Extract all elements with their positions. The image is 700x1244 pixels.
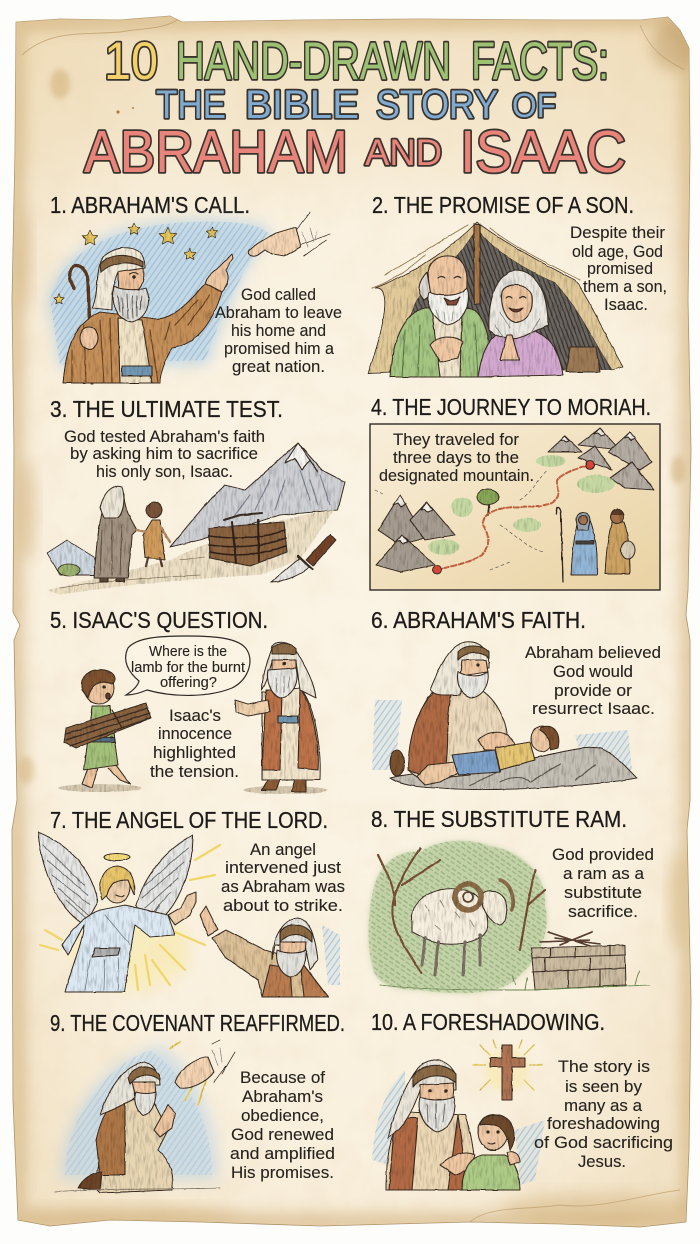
heading 7: 7. THE ANGEL OF THE LORD. xyxy=(50,807,328,833)
blue wash xyxy=(60,1045,218,1180)
speech bubble xyxy=(126,636,250,695)
heading 1: 1. ABRAHAM'S CALL. xyxy=(50,192,250,218)
caption 10: foreshadowing xyxy=(547,1114,660,1133)
raised hand xyxy=(205,254,233,292)
wings xyxy=(38,832,193,928)
title xyxy=(84,32,626,185)
caption 5: Isaac's xyxy=(169,706,221,725)
head xyxy=(118,265,144,292)
head xyxy=(104,871,130,903)
start and end markers xyxy=(432,460,594,574)
grass xyxy=(380,971,650,990)
title: BIBLE xyxy=(245,83,359,127)
caption 7: An angel xyxy=(250,840,316,859)
Isaac xyxy=(462,1114,520,1190)
speech bubble: Where is the xyxy=(149,643,227,660)
wood bundle xyxy=(209,513,287,566)
caption 9 xyxy=(230,1068,335,1182)
caption 2 xyxy=(570,223,667,314)
caption 10: The story is xyxy=(558,1057,650,1076)
caption 1: promised him a xyxy=(224,339,335,358)
staff xyxy=(70,265,92,383)
right mountains xyxy=(548,428,654,490)
heading 3: 3. THE ULTIMATE TEST. xyxy=(50,396,283,422)
caption 6: Abraham believed xyxy=(525,643,661,662)
caption 7 xyxy=(221,840,345,915)
ram body xyxy=(412,889,488,944)
panel: 7 The angel of the Lord xyxy=(38,807,345,997)
heading 9: 9. THE COVENANT REAFFIRMED. xyxy=(50,1010,345,1036)
panel: 1 Abraham's call xyxy=(48,192,342,383)
icon: divine pointing hand xyxy=(248,212,330,256)
panel: 9 The covenant reaffirmed xyxy=(50,1010,345,1193)
caption 10: Jesus. xyxy=(578,1152,626,1171)
caption 2: Isaac. xyxy=(604,295,648,314)
caption 6: resurrect Isaac. xyxy=(532,699,655,718)
caption 10: many as a xyxy=(564,1096,643,1115)
knife xyxy=(271,534,336,582)
panel: 10 A foreshadowing xyxy=(371,1009,673,1190)
title: 10 xyxy=(104,32,158,91)
caption 9: Abraham's xyxy=(242,1087,323,1106)
robe xyxy=(62,905,175,992)
Abraham xyxy=(390,256,492,377)
caption 7: about to strike. xyxy=(223,896,343,915)
caption 9: and amplified xyxy=(230,1144,335,1163)
caption 1: God called xyxy=(241,285,316,304)
Abraham from behind xyxy=(94,490,137,578)
illustration: Abraham, Isaac and the cross xyxy=(372,1040,545,1190)
caption 9: His promises. xyxy=(231,1163,334,1182)
caption 3 xyxy=(64,427,265,481)
caption 1: Abraham to leave xyxy=(215,303,342,322)
heading 10: 10. A FORESHADOWING. xyxy=(371,1009,605,1035)
caption 5: highlighted xyxy=(153,743,236,762)
caption 3: his only son, Isaac. xyxy=(96,462,233,481)
caption 5: the tension. xyxy=(150,762,239,781)
caption 6: God would xyxy=(553,662,633,681)
panel: 2 The promise of a son xyxy=(368,192,667,377)
tent xyxy=(368,222,623,373)
illustration: Abraham and Sarah in a tent xyxy=(368,222,623,377)
caption 5 xyxy=(150,706,239,781)
caption 2: Despite their xyxy=(570,223,665,242)
caption 1: great nation. xyxy=(232,357,325,376)
Abraham xyxy=(390,642,516,780)
title: STORY xyxy=(376,83,498,127)
caption 8: substitute xyxy=(564,883,642,902)
panel: 5 Isaac's question xyxy=(50,607,327,794)
speech bubble: offering? xyxy=(160,674,217,691)
illustration: father and son walking to the mountain xyxy=(47,443,345,595)
caption 10: is seen by xyxy=(565,1077,642,1096)
caption 1: his home and xyxy=(231,321,326,340)
caption 7: as Abraham was xyxy=(221,877,345,896)
caption 6: provide or xyxy=(554,681,632,700)
rays xyxy=(40,845,220,990)
heading 6: 6. ABRAHAM'S FAITH. xyxy=(371,607,586,633)
Abraham xyxy=(386,1060,476,1190)
heading 4: 4. THE JOURNEY TO MORIAH. xyxy=(371,394,651,420)
title: ABRAHAM xyxy=(84,119,348,185)
map xyxy=(370,424,660,590)
panel: 3 The ultimate test xyxy=(47,396,345,595)
illustration: angel stopping Abraham xyxy=(38,832,340,997)
icon: cross with rays xyxy=(473,1040,542,1100)
title: ISAAC xyxy=(460,119,626,185)
heading 2: 2. THE PROMISE OF A SON. xyxy=(372,192,634,218)
panel: 6 Abraham's faith xyxy=(371,607,661,790)
speech bubble: lamb for the burnt xyxy=(131,659,246,676)
caption 6 xyxy=(525,643,661,718)
caption 9: Because of xyxy=(240,1068,325,1087)
caption 2: them a son, xyxy=(583,277,667,296)
ram head xyxy=(482,891,507,925)
heading 5: 5. ISAAC'S QUESTION. xyxy=(50,607,268,633)
caption 7: intervened just xyxy=(225,858,341,877)
title: AND xyxy=(365,132,442,173)
title: THE xyxy=(156,83,226,127)
caption 4: designated mountain. xyxy=(379,466,534,485)
Abraham reaching up xyxy=(200,906,328,997)
caption 2: old age, God xyxy=(572,242,663,261)
caption 8 xyxy=(552,845,654,921)
illustration: ram in the thicket and stone altar xyxy=(369,841,650,993)
Isaac on map xyxy=(605,509,635,574)
bush xyxy=(58,564,80,576)
green patches xyxy=(428,455,615,555)
panel: 4 The journey to Moriah xyxy=(370,394,660,590)
illustration: Abraham kneeling beside Isaac xyxy=(372,642,637,790)
caption 8: God provided xyxy=(552,845,654,864)
Isaac lying xyxy=(417,726,559,785)
ground xyxy=(47,510,334,595)
illustration: Abraham answering xyxy=(235,642,327,794)
caption 3: God tested Abraham's faith xyxy=(64,427,265,446)
title: FACTS: xyxy=(471,32,609,91)
kneeling Abraham xyxy=(78,1062,175,1193)
altar xyxy=(531,932,626,990)
robe xyxy=(63,283,222,383)
caption 4: They traveled for xyxy=(393,430,519,449)
panel: 8 The substitute ram xyxy=(369,806,654,993)
caption 8: sacrifice. xyxy=(568,902,638,921)
caption 5: innocence xyxy=(158,724,232,743)
halo xyxy=(104,854,130,860)
illustration: Abraham pointing at stars xyxy=(48,212,330,383)
illustration: Isaac carrying wood xyxy=(58,670,151,792)
jar xyxy=(566,347,600,372)
Sarah xyxy=(478,270,563,377)
faint dashed trails xyxy=(375,470,548,570)
caption 4: three days to the xyxy=(393,448,519,467)
bush xyxy=(369,841,547,993)
dashed journey path xyxy=(437,465,590,570)
hand on staff xyxy=(80,327,98,349)
caption 4 xyxy=(379,430,534,485)
caption 2: promised xyxy=(587,259,653,278)
Abraham on map xyxy=(557,507,597,582)
caption 3: by asking him to sacrifice xyxy=(70,444,258,463)
caption 9: obedience, xyxy=(241,1106,324,1125)
caption 1 xyxy=(215,285,342,376)
divine open hand xyxy=(175,1040,235,1088)
left mountains xyxy=(376,495,455,572)
rock xyxy=(390,748,637,790)
title: OF xyxy=(512,87,556,125)
tree xyxy=(378,848,545,973)
mountains xyxy=(47,443,345,575)
illustration: Abraham praying beneath God's hand xyxy=(55,1040,235,1193)
title: HAND-DRAWN xyxy=(176,32,451,91)
caption 10 xyxy=(534,1057,673,1171)
Isaac from behind xyxy=(143,520,165,560)
caption 10: of God sacrificing xyxy=(534,1133,673,1152)
caption 9: God renewed xyxy=(231,1125,334,1144)
yellow glow xyxy=(70,910,190,990)
heading 8: 8. THE SUBSTITUTE RAM. xyxy=(371,806,627,832)
caption 8: a ram as a xyxy=(563,864,645,883)
tree xyxy=(477,489,499,515)
